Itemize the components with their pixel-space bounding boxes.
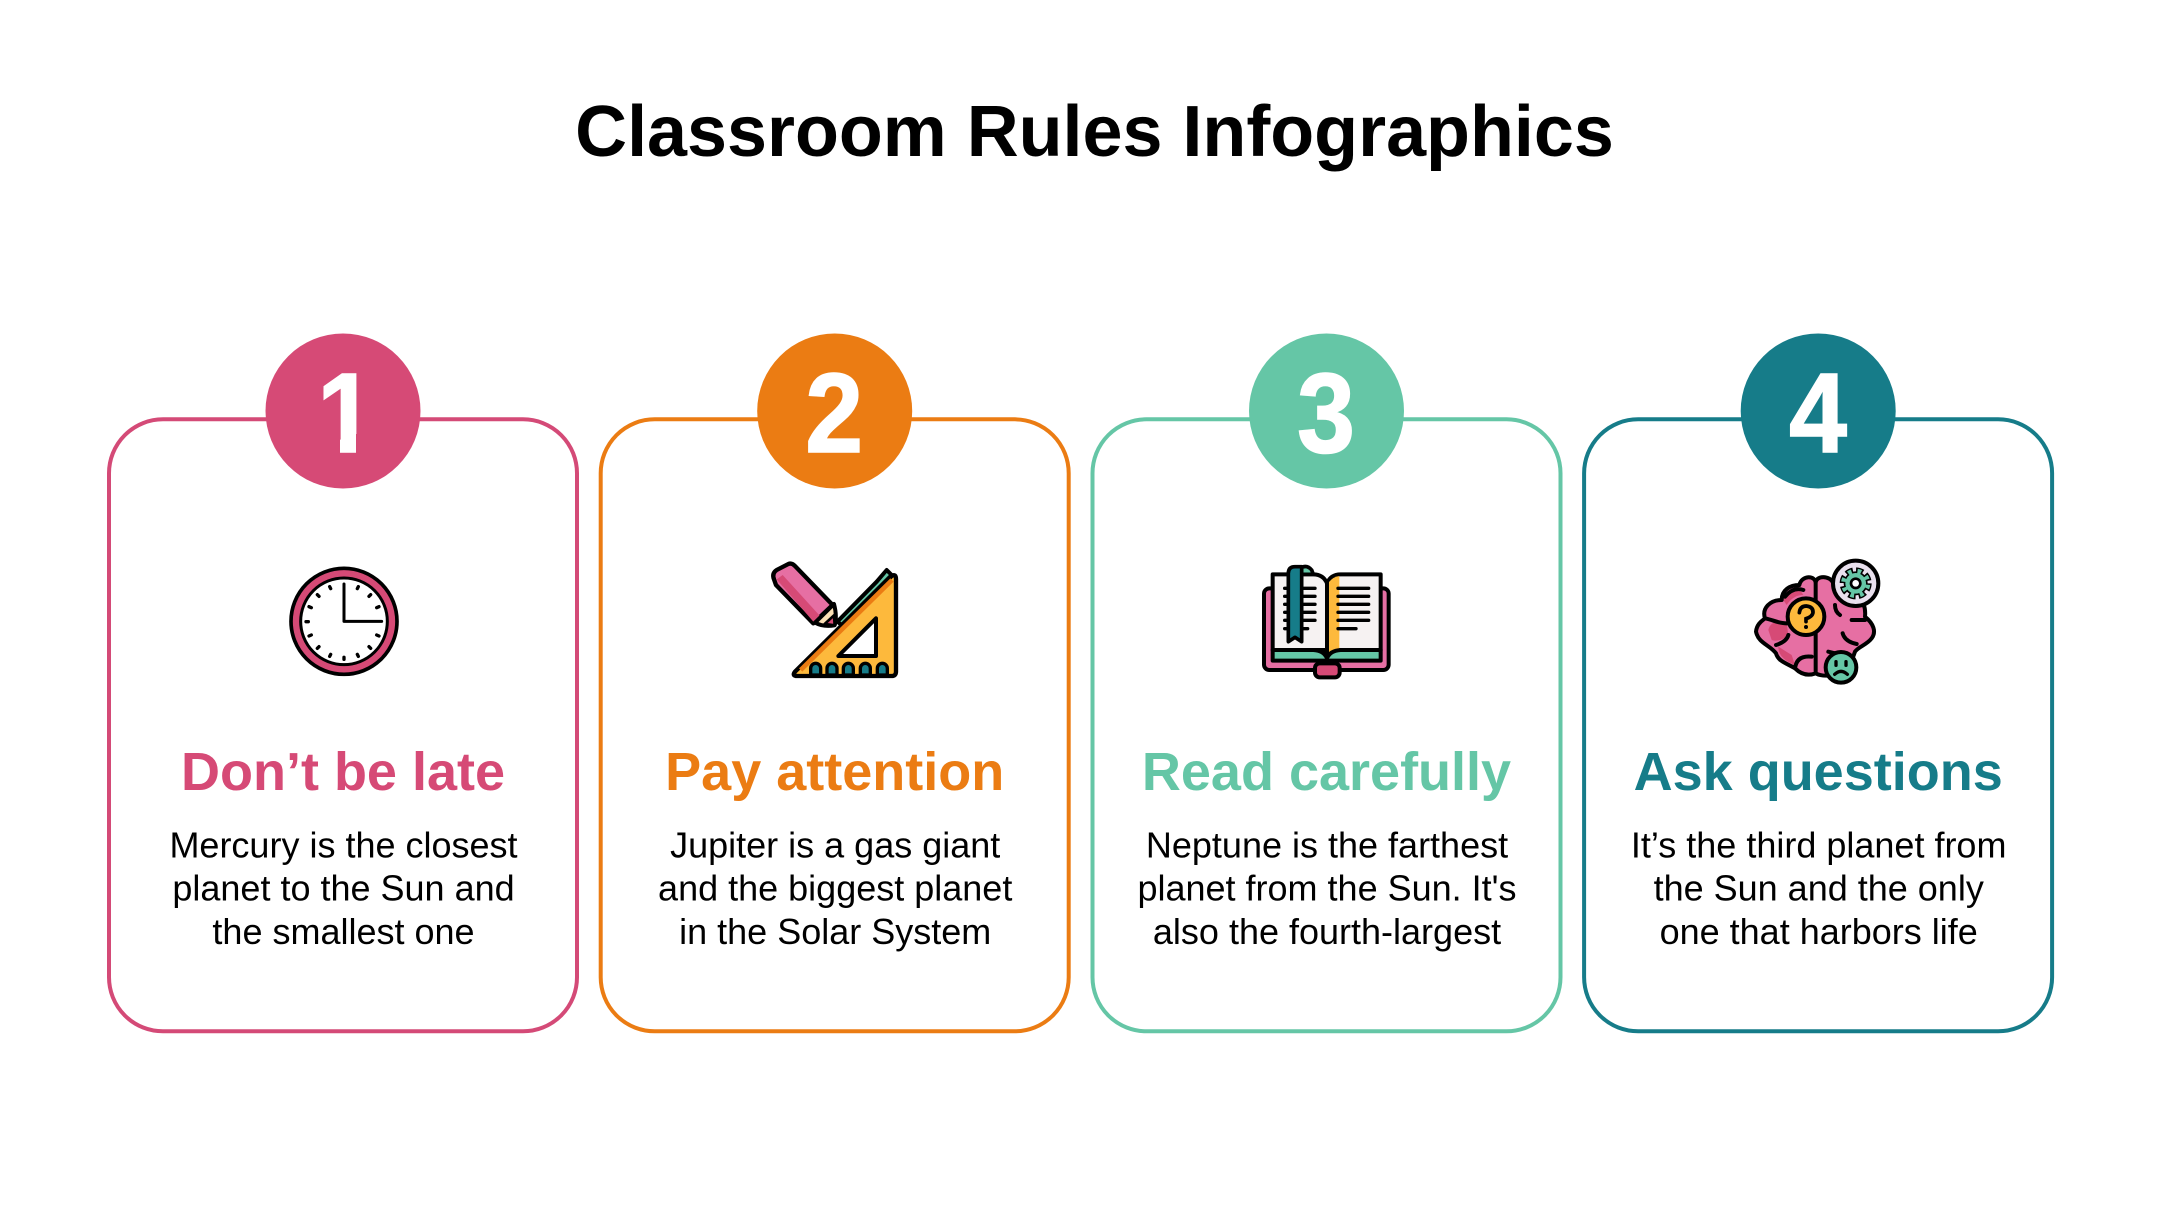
body text 2: in the Solar System <box>679 911 991 952</box>
heading 2: Pay attention <box>665 742 1004 802</box>
number badge 1: 1 <box>317 351 375 477</box>
heading 4: Ask questions <box>1634 742 2003 802</box>
card outline 4 <box>1584 419 2052 1031</box>
card outline 2 <box>601 419 1069 1031</box>
body text 2: Jupiter is a gas giant <box>670 824 1000 866</box>
number badge 2 <box>757 334 912 488</box>
body text 4: the Sun and the only <box>1654 868 1984 909</box>
icon: set square and pencil <box>773 564 896 676</box>
heading 1: Don’t be late <box>181 742 505 802</box>
number badge 4 <box>1741 334 1896 488</box>
card outline 1 <box>109 419 577 1031</box>
body text 1: Mercury is the closest <box>169 824 518 866</box>
panel: rule 4 ask questions <box>1584 334 2052 1031</box>
body text 4: It’s the third planet from <box>1631 824 2006 866</box>
body text 4: one that harbors life <box>1660 911 1978 952</box>
number badge 4: 4 <box>1789 351 1847 477</box>
body text 3: planet from the Sun. It's <box>1137 868 1517 909</box>
heading 3: Read carefully <box>1142 742 1511 802</box>
body text 2: and the biggest planet <box>658 868 1012 909</box>
title: Classroom Rules Infographics <box>575 92 1614 172</box>
number badge 2: 2 <box>805 351 863 477</box>
card outline 3 <box>1092 419 1560 1031</box>
body text 3: Neptune is the farthest <box>1146 824 1508 866</box>
panel: rule 3 read carefully <box>1092 334 1560 1031</box>
icon: brain with gear, question mark and sad face <box>1756 561 1878 683</box>
body text 1: the smallest one <box>212 911 475 952</box>
number badge 3 <box>1249 334 1404 488</box>
number badge 3: 3 <box>1297 351 1355 477</box>
icon: open book <box>1264 567 1389 677</box>
number badge 1 <box>266 334 420 488</box>
panel: rule 2 pay attention <box>601 334 1069 1031</box>
body text 3: also the fourth-largest <box>1153 911 1501 952</box>
body text 1: planet to the Sun and <box>172 868 515 909</box>
panel: rule 1 don't be late <box>109 334 577 1031</box>
icon: clock <box>291 568 397 674</box>
